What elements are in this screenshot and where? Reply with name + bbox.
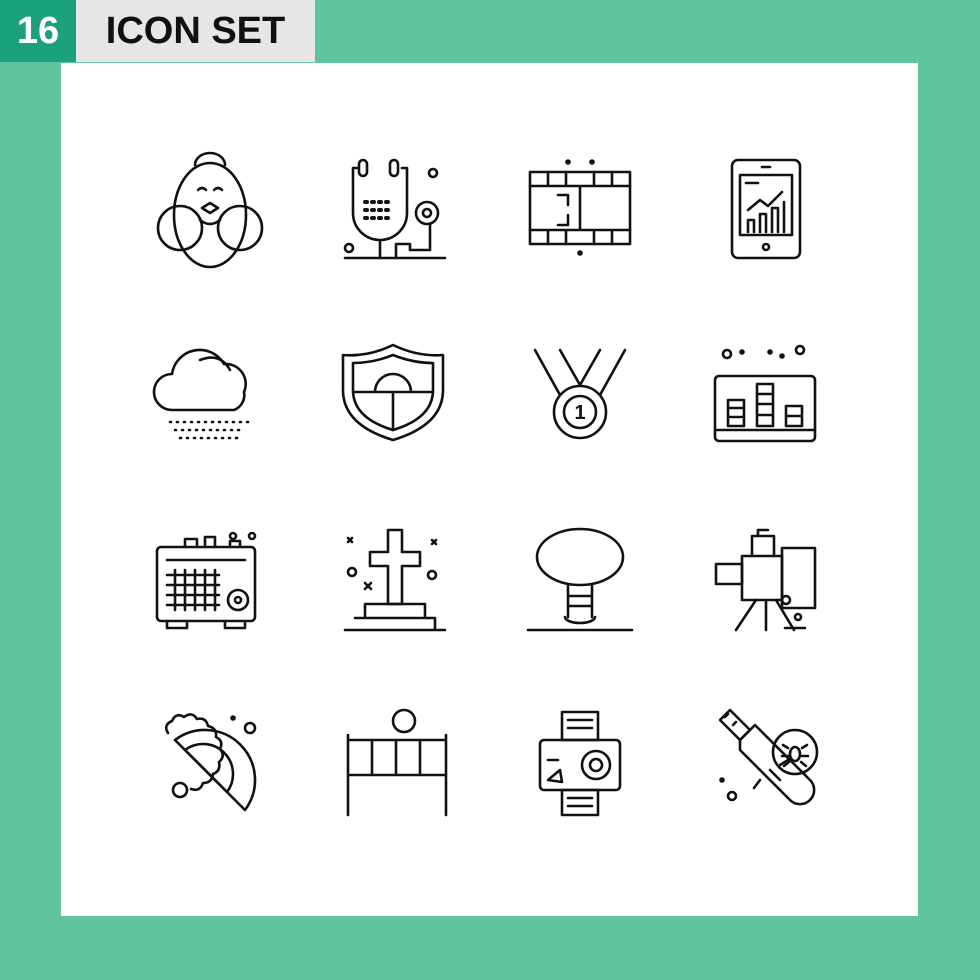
icon: stool (528, 529, 632, 630)
title (76, 0, 315, 62)
icon: volleyball net (348, 710, 446, 815)
badge: number: 16 (17, 10, 59, 52)
icon: shield (343, 345, 443, 440)
icon: usb bug (720, 710, 817, 804)
icon: film strip (530, 160, 630, 254)
icon: dumpling (166, 714, 255, 810)
icon: rain cloud (154, 350, 250, 438)
panel: icon grid (61, 63, 918, 916)
icon: telescope (716, 530, 815, 630)
icon: phone chart (732, 160, 800, 258)
icon: stethoscope (345, 160, 445, 258)
title: ICON SET (106, 10, 285, 52)
icon: equalizer panel (715, 346, 815, 441)
badge: number (0, 0, 76, 62)
icon: bird (158, 153, 262, 267)
icon: radio (157, 533, 255, 628)
icon: medal (535, 350, 625, 438)
icon: medal: 1 (574, 402, 586, 424)
icon: grave cross (345, 530, 445, 630)
icon: action camera (540, 712, 620, 815)
